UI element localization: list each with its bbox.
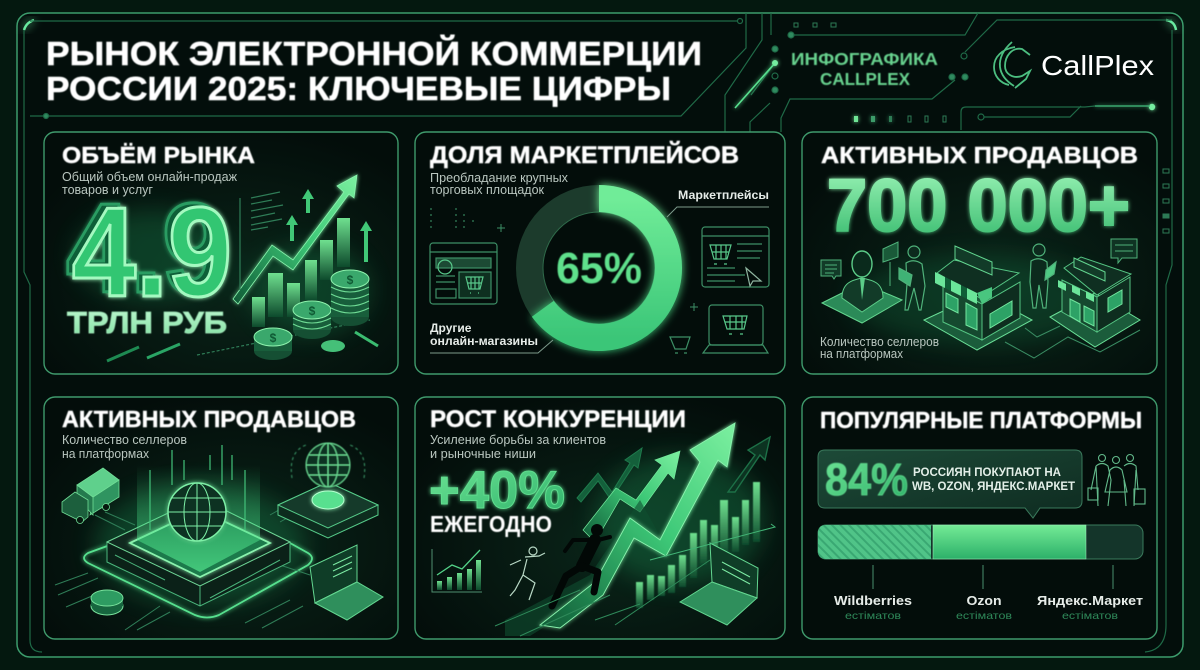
ambient glow (850, 255, 1110, 345)
icon: coin (91, 590, 123, 615)
heading: АКТИВНЫХ ПРОДАВЦОВ (62, 406, 356, 432)
icon: chat bubble (821, 260, 841, 279)
callout value: 84% (825, 454, 908, 505)
icon: cart (670, 337, 690, 353)
heading: РОСТ КОНКУРЕНЦИИ (430, 406, 686, 433)
callout text: РОССИЯН ПОКУПАЮТ НА (913, 465, 1061, 479)
icon: laptop (310, 545, 383, 620)
stacked bar (818, 525, 1143, 559)
description (430, 433, 606, 461)
icon: main globe (168, 483, 226, 541)
shop large (924, 246, 1032, 350)
plus marks (497, 224, 698, 311)
icon: laptop (680, 543, 758, 625)
callout text: WB, OZON, ЯНДЕКС.МАРКЕТ (912, 479, 1076, 493)
description: Общий объем онлайн-продаж (62, 170, 238, 184)
description: товаров и услуг (62, 183, 153, 197)
label: Yandex Market: естiматов (1062, 610, 1118, 622)
heading: АКТИВНЫХ ПРОДАВЦОВ (821, 142, 1138, 168)
description: Количество селлеров (820, 335, 939, 349)
icon: speech sign (1111, 239, 1137, 263)
panel: competition growth (415, 397, 785, 639)
header label (791, 49, 938, 89)
lower arrows (107, 332, 378, 361)
middle arrow (583, 451, 680, 542)
icon: price sign (883, 242, 898, 286)
thin circuit lines (55, 498, 312, 630)
icon: laptop with cart (703, 305, 768, 353)
coin stack tall: $ (347, 273, 354, 287)
icon: small chart (432, 549, 482, 592)
light beams (137, 465, 260, 572)
person with laptop left (899, 246, 925, 310)
label: Yandex Market: Яндекс.Маркет (1037, 593, 1143, 608)
label: Ozon: Ozon (966, 593, 1002, 608)
icon: CallPlex mark (994, 42, 1030, 88)
callout (818, 450, 1082, 518)
header label: CALLPLEX (820, 69, 910, 89)
description (820, 335, 939, 361)
label: marketplaces (667, 190, 769, 217)
big number 4.9: 4.9 (72, 181, 232, 323)
floor band (505, 424, 735, 636)
segment: Ozon (933, 525, 1086, 559)
small up arrows (286, 189, 372, 262)
beam streaks (150, 445, 245, 530)
coin stack medium: $ (309, 304, 316, 318)
server device (107, 498, 290, 606)
runner large (552, 524, 610, 606)
description (62, 433, 187, 461)
coin stacks (254, 270, 369, 360)
description: и рыночные ниши (430, 447, 536, 461)
label: Ozon: естiматов (956, 610, 1012, 622)
leader lines (873, 565, 1113, 589)
heading: ДОЛЯ МАРКЕТПЛЕЙСОВ (430, 141, 739, 169)
big number 4.9: 4.9 (66, 177, 226, 319)
chart axis and notes (197, 192, 370, 355)
title: РЫНОК ЭЛЕКТРОННОЙ КОММЕРЦИИ (46, 34, 702, 72)
description (62, 170, 238, 197)
description: торговых площадок (430, 183, 545, 197)
panel: marketplace share (415, 132, 785, 374)
title: РОССИИ 2025: КЛЮЧЕВЫЕ ЦИФРЫ (46, 70, 671, 107)
description: Количество селлеров (62, 433, 187, 447)
donut value: 65% (556, 244, 642, 293)
panel: popular platforms (802, 397, 1157, 639)
icon: browser with cart right (702, 227, 769, 287)
heading: ОБЪЁМ РЫНКА (62, 142, 255, 168)
circuit glow outline (84, 543, 312, 618)
coin stack small: $ (270, 331, 277, 345)
illustration: manager bust (822, 251, 902, 323)
dots decoration (430, 208, 474, 228)
label: Yandex Market (1037, 593, 1143, 622)
subtitle: ЕЖЕГОДНО (430, 511, 552, 537)
decorative square markers (794, 23, 1169, 233)
connector traces (1005, 326, 1140, 358)
main arrow (540, 423, 735, 628)
bar chart (636, 482, 760, 608)
logo: CallPlex (1041, 50, 1154, 81)
heading: ПОПУЛЯРНЫЕ ПЛАТФОРМЫ (820, 407, 1142, 433)
secondary pedestal (278, 482, 378, 538)
label: Ozon (956, 593, 1012, 622)
title (46, 34, 702, 107)
description: на платформах (62, 447, 150, 461)
big number: 700 000+ (827, 164, 1130, 247)
icon: truck (62, 468, 119, 524)
label: other stores: онлайн-магазины (430, 334, 538, 348)
panel: active sellers top (802, 132, 1157, 374)
label: other stores: Другие (430, 321, 472, 335)
ambient glow (95, 485, 305, 605)
donut chart (530, 198, 668, 338)
label: Wildberries: естiматов (845, 610, 901, 622)
person with laptop right (1030, 244, 1056, 308)
unit label: ТРЛН РУБ (67, 305, 227, 340)
description: Преобладание крупных (430, 171, 569, 185)
big number: +40% (429, 461, 565, 520)
shop small (1050, 257, 1140, 347)
floor lines (495, 560, 710, 636)
label: Wildberries (834, 593, 912, 622)
callout text (912, 465, 1076, 493)
icon: shoppers (1088, 454, 1145, 506)
label: other stores (430, 321, 553, 353)
runner small (510, 547, 545, 600)
description (430, 171, 569, 197)
header label: ИНФОГРАФИКА (791, 49, 938, 69)
growth arrow (233, 175, 357, 304)
outline arrow (577, 448, 642, 502)
panel: market size (44, 132, 398, 374)
ambient glow (75, 210, 370, 335)
description: Усиление борьбы за клиентов (430, 433, 606, 447)
bar chart (252, 218, 350, 327)
bright circuit accents (735, 60, 1155, 122)
logo (994, 42, 1154, 88)
description: на платформах (820, 347, 904, 361)
label: Wildberries: Wildberries (834, 593, 912, 608)
icon: browser with cart left (430, 243, 497, 304)
right thin arrow (728, 437, 770, 492)
label: marketplaces: Маркетплейсы (678, 190, 769, 202)
icon: small globe (291, 443, 365, 487)
segment: Wildberries (818, 525, 931, 559)
panel: active sellers lower (44, 397, 398, 639)
ambient glow (595, 455, 765, 585)
